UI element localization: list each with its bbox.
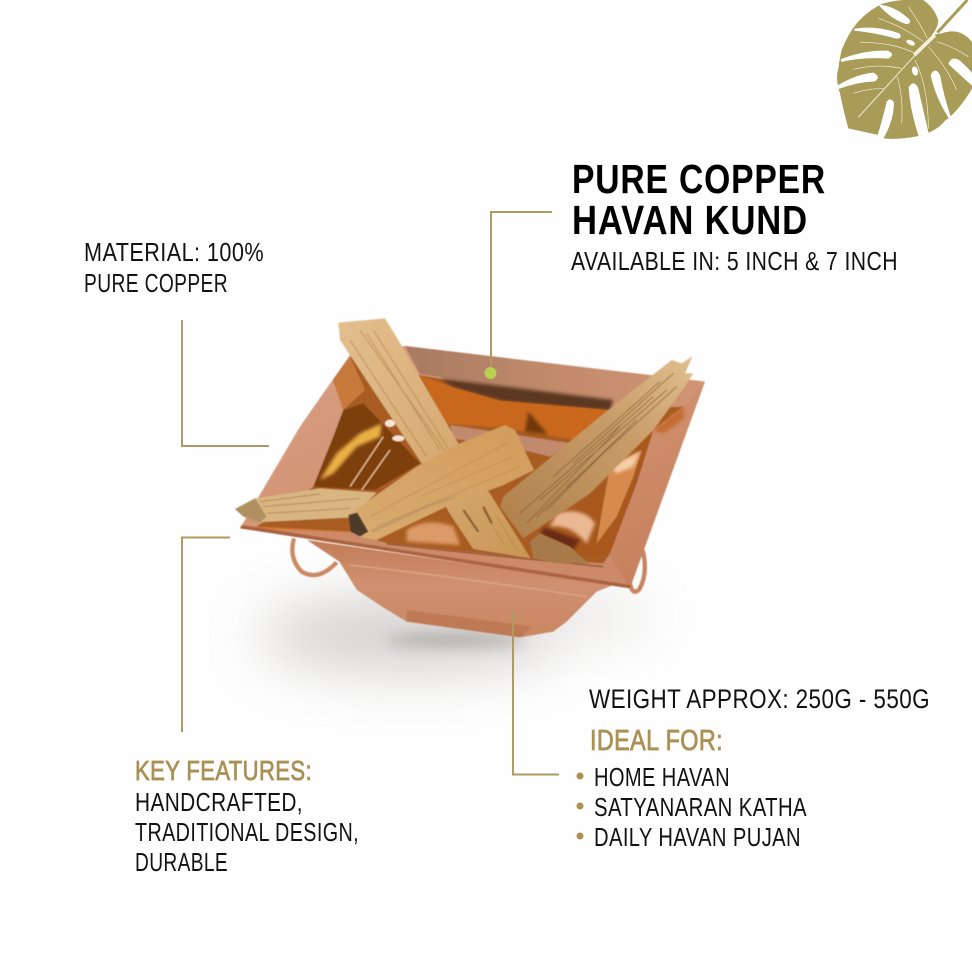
title (572, 156, 826, 243)
front rim (240, 528, 630, 588)
title: PURE COPPER (572, 156, 826, 202)
back wall orange reflection (420, 375, 610, 441)
back rim band (405, 346, 705, 407)
bowl shadow (260, 595, 650, 673)
left wall (313, 403, 420, 490)
back wall dark band (440, 378, 613, 411)
wood stick cross (348, 425, 534, 540)
key features (135, 755, 359, 877)
leader line: weight and uses (513, 611, 559, 774)
orange patch on right rim (653, 407, 684, 434)
leaf stem (937, 0, 967, 33)
material (84, 237, 264, 298)
wood stick long (338, 318, 531, 558)
ideal for: IDEAL FOR: (590, 725, 723, 757)
back wall pale strip (450, 425, 572, 457)
interior base (257, 357, 683, 563)
right handle (630, 550, 645, 592)
key features: KEY FEATURES: (135, 755, 312, 786)
key features: DURABLE (135, 847, 228, 877)
leaf midrib and veins (853, 7, 968, 128)
material: PURE COPPER (84, 268, 228, 298)
subtitle: AVAILABLE IN: 5 INCH & 7 INCH (571, 246, 898, 276)
material: MATERIAL: 100% (84, 237, 264, 267)
leaf slots (837, 5, 972, 139)
left handle (292, 538, 337, 575)
right wall (537, 430, 653, 558)
icon: monstera leaf (837, 0, 972, 139)
bullet list: DAILY HAVAN PUJAN (594, 822, 801, 852)
small wood piece (530, 533, 588, 563)
key features: TRADITIONAL DESIGN, (135, 817, 359, 847)
ideal for (576, 725, 807, 852)
front reflections (407, 522, 460, 545)
wood stick left (235, 488, 377, 522)
wood stick right (500, 356, 693, 538)
leader line: title (491, 212, 552, 366)
rim (240, 346, 705, 588)
leader line: key features (182, 538, 230, 732)
bullet list: HOME HAVAN (594, 762, 730, 792)
key features: HANDCRAFTED, (135, 787, 303, 817)
leader line: material (182, 320, 269, 446)
marker dot (484, 367, 496, 379)
bullet list (576, 762, 807, 852)
bowl body (307, 540, 613, 637)
title: HAVAN KUND (572, 197, 808, 243)
product: copper havan kund with wood sticks (235, 318, 705, 637)
bullet list: SATYANARAN KATHA (594, 792, 807, 822)
